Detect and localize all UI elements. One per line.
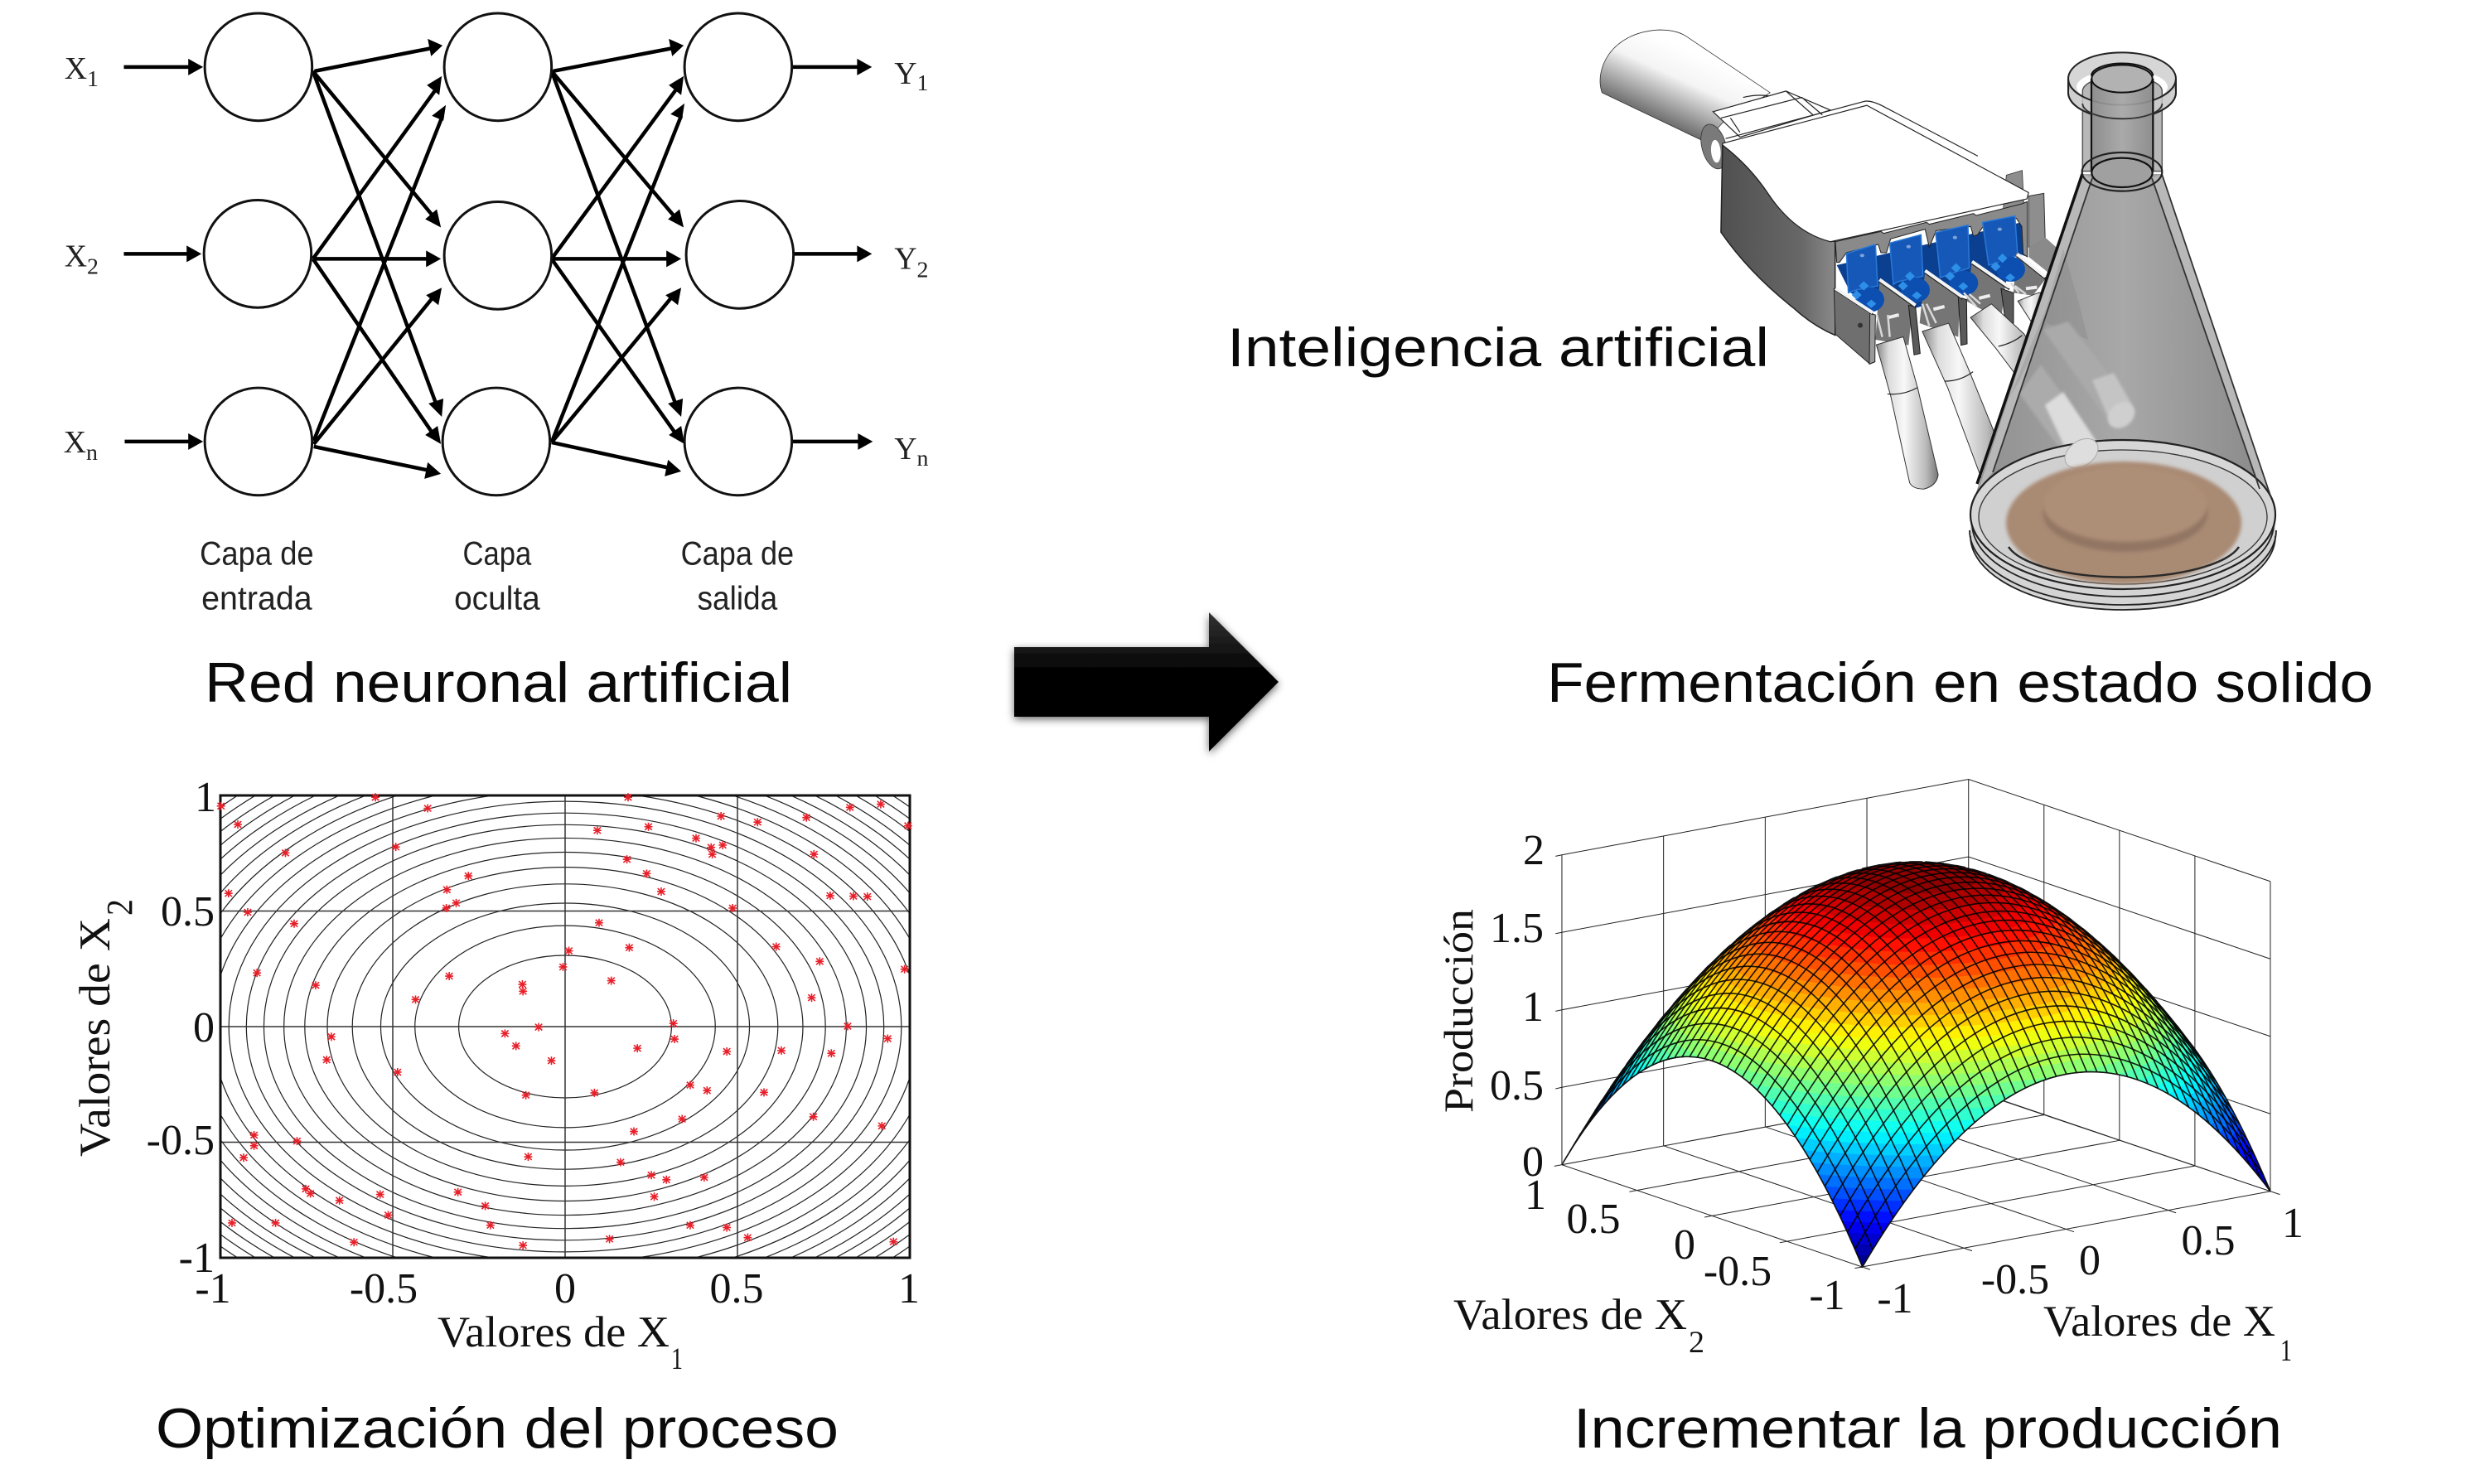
device handle bbox=[1600, 30, 1770, 142]
output labels: n bbox=[917, 446, 929, 471]
lower flange bbox=[2068, 66, 2176, 118]
y axis tick labels: 0.5 bbox=[161, 888, 215, 935]
cone walls bbox=[1979, 174, 2271, 497]
input labels: 2 bbox=[87, 254, 99, 279]
dark side panel bbox=[1721, 145, 1835, 336]
production axis ticks bbox=[1490, 827, 1545, 1186]
dish inner rim bbox=[1979, 450, 2267, 584]
input labels: X bbox=[65, 51, 87, 86]
flask neck bbox=[2068, 52, 2176, 191]
X2 axis ticks: -1 bbox=[1809, 1272, 1845, 1319]
x axis tick labels bbox=[195, 1265, 920, 1312]
contour ellipses bbox=[222, 797, 908, 1256]
white strips bbox=[1835, 254, 2045, 312]
heading: Incrementar la producción: Incrementar la producción bbox=[1574, 1397, 2282, 1460]
soil front edge bbox=[2009, 547, 2239, 578]
X2 axis ticks: -0.5 bbox=[1704, 1248, 1772, 1295]
gray side sheets bbox=[1875, 253, 2047, 346]
production axis ticks: 2 bbox=[1523, 827, 1545, 874]
white top housing bbox=[1723, 105, 2028, 242]
panel: sensor device and flask bbox=[1600, 30, 2276, 610]
y axis tick labels: 1 bbox=[195, 774, 216, 821]
back tab bbox=[2004, 171, 2023, 210]
red data points bbox=[217, 793, 912, 1250]
layer captions: Capa bbox=[463, 536, 532, 573]
soil layer shadow bbox=[2043, 476, 2207, 552]
blue plate 3 bbox=[1936, 225, 1970, 278]
round valve bodies bbox=[1855, 257, 2025, 312]
input labels bbox=[64, 51, 99, 466]
right bracket bbox=[2028, 193, 2045, 247]
x axis title bbox=[438, 1308, 683, 1376]
output labels: 2 bbox=[917, 257, 928, 283]
X2 axis title: 2 bbox=[1689, 1326, 1704, 1360]
pivot ring bbox=[1696, 122, 1732, 172]
input labels: X bbox=[64, 425, 86, 460]
neural network connections bbox=[123, 39, 873, 479]
plate holes bbox=[1860, 228, 2002, 257]
input labels: 1 bbox=[87, 66, 99, 92]
neck mouth bbox=[2091, 65, 2153, 93]
left wall bbox=[1834, 288, 1875, 364]
neck base inner bbox=[2091, 158, 2153, 187]
y axis title bbox=[71, 899, 140, 1157]
output labels bbox=[894, 56, 929, 471]
x axis title: 1 bbox=[671, 1342, 683, 1376]
cone inner lines bbox=[1993, 174, 2271, 498]
panel: artificial neural network bbox=[64, 13, 929, 617]
X1 axis ticks: -0.5 bbox=[1981, 1256, 2049, 1303]
post 1 bbox=[1869, 313, 1875, 364]
X1 axis title: Valores de X bbox=[2043, 1298, 2275, 1346]
X1 axis ticks: -1 bbox=[1877, 1275, 1913, 1322]
chart frame bbox=[220, 795, 910, 1258]
X2 axis ticks: 0.5 bbox=[1566, 1196, 1621, 1243]
output labels: Y bbox=[894, 432, 917, 466]
wires bbox=[1877, 283, 2026, 337]
sensors bbox=[1876, 292, 2047, 489]
dish rim bbox=[1970, 440, 2275, 589]
production axis ticks: 1 bbox=[1522, 984, 1544, 1031]
X1 axis title bbox=[2043, 1298, 2292, 1368]
sensor 1 bbox=[1876, 337, 1938, 489]
housing edge line bbox=[1726, 101, 1978, 156]
sensor 3 bbox=[1970, 304, 2035, 375]
sensor 3 through glass bbox=[2019, 365, 2099, 466]
layer captions: salida bbox=[698, 580, 778, 617]
X1 axis ticks: 0 bbox=[2079, 1237, 2101, 1284]
conical flask bbox=[1970, 52, 2276, 610]
y axis title: 2 bbox=[99, 899, 140, 916]
surface mesh lines along X2 bbox=[1564, 862, 2270, 1267]
x axis tick labels: -1 bbox=[195, 1265, 231, 1312]
sensor tip in dish bbox=[2059, 433, 2104, 474]
X2 axis ticks: 1 bbox=[1525, 1172, 1546, 1219]
X1 axis title: 1 bbox=[2280, 1334, 2292, 1368]
lower soil layer bbox=[2006, 462, 2241, 584]
output labels: 1 bbox=[917, 70, 928, 96]
surface mesh lines along X1 bbox=[1569, 862, 2270, 1267]
panel: 3D response surface bbox=[1443, 779, 2301, 1361]
panel: contour chart bbox=[79, 782, 917, 1369]
heading: Fermentación en estado solido: Fermentación en estado solido bbox=[1547, 651, 2373, 714]
lower right bracket bbox=[2028, 238, 2057, 273]
surface colour slices bbox=[1589, 863, 2268, 1266]
neck top highlight bbox=[2091, 63, 2153, 76]
x axis tick labels: 1 bbox=[898, 1265, 920, 1312]
production axis ticks: 1.5 bbox=[1490, 905, 1544, 952]
X2 axis title: Valores de X bbox=[1453, 1291, 1687, 1339]
cone outline bbox=[1977, 174, 2082, 484]
X1 axis ticks: 1 bbox=[2282, 1200, 2304, 1247]
layer captions: entrada bbox=[201, 580, 312, 617]
blue plate 2 bbox=[1890, 234, 1923, 284]
layer captions: oculta bbox=[454, 580, 541, 617]
wall screw bbox=[1858, 323, 1863, 328]
y axis tick labels: -1 bbox=[179, 1235, 215, 1282]
valve highlights bbox=[1852, 254, 2015, 308]
X1 axis ticks: 0.5 bbox=[2181, 1217, 2236, 1264]
layer captions: Capa de bbox=[200, 536, 314, 573]
heading: Red neuronal artificial: Red neuronal artificial bbox=[205, 651, 792, 714]
label: Inteligencia artificial: Inteligencia artificial bbox=[1227, 317, 1769, 378]
X2 axis ticks bbox=[1525, 1172, 1845, 1319]
arrow: process direction bbox=[1014, 612, 1279, 752]
y axis tick labels bbox=[147, 774, 216, 1282]
layer captions bbox=[200, 536, 794, 617]
bracket seen through glass bbox=[2009, 249, 2088, 398]
axis box grid bbox=[1554, 780, 2280, 1269]
blue plate 4 bbox=[1983, 216, 2018, 265]
flange opening bbox=[2076, 70, 2168, 104]
y axis tick labels: -0.5 bbox=[147, 1117, 215, 1164]
other posts bbox=[1908, 288, 2014, 355]
inner neck bbox=[2091, 79, 2153, 172]
outer neck bbox=[2082, 76, 2162, 172]
output labels: Y bbox=[894, 241, 917, 276]
front flange band bbox=[2068, 79, 2176, 118]
flask cone body bbox=[1970, 174, 2275, 584]
X2 axis title bbox=[1453, 1291, 1704, 1360]
sensor 2 bbox=[1922, 323, 2004, 486]
white strip shadows bbox=[1835, 256, 2045, 314]
neuron circles bbox=[204, 13, 794, 495]
dish base crescent bbox=[1970, 515, 2276, 610]
production axis ticks: 0 bbox=[1522, 1138, 1544, 1186]
heading: Optimización del proceso: Optimización del proceso bbox=[156, 1397, 839, 1460]
hinge bbox=[1713, 91, 1830, 137]
upper soil layer bbox=[2043, 467, 2207, 542]
x axis tick labels: 0.5 bbox=[709, 1265, 764, 1312]
X2 axis ticks: 0 bbox=[1674, 1221, 1695, 1269]
y axis title: Valores de X bbox=[71, 918, 119, 1157]
x axis title: Valores de X bbox=[438, 1308, 670, 1356]
gray header with notches bbox=[1835, 201, 2028, 263]
input labels: n bbox=[86, 440, 98, 466]
surface silhouette bbox=[1562, 862, 2270, 1267]
blue plate 1 bbox=[1846, 244, 1878, 292]
input labels: X bbox=[65, 239, 87, 273]
sensor 4 bbox=[2018, 292, 2047, 327]
output labels: Y bbox=[894, 56, 917, 91]
upper flange bbox=[2068, 52, 2176, 105]
device body bbox=[1600, 30, 2028, 336]
valve assembly bbox=[1834, 193, 2057, 364]
neck base outer bbox=[2082, 152, 2162, 191]
sensor 4 through glass bbox=[2043, 321, 2140, 433]
x axis tick labels: -0.5 bbox=[350, 1265, 418, 1312]
x axis tick labels: 0 bbox=[554, 1265, 576, 1312]
production axis title: Producción bbox=[1435, 909, 1482, 1113]
layer captions: Capa de bbox=[681, 536, 794, 573]
y axis tick labels: 0 bbox=[193, 1004, 215, 1051]
dark blue back panel bbox=[1837, 221, 2028, 315]
production axis ticks: 0.5 bbox=[1490, 1062, 1544, 1109]
pins bbox=[1888, 288, 2037, 317]
X1 axis ticks bbox=[1877, 1200, 2304, 1322]
neck band bbox=[2082, 104, 2162, 118]
